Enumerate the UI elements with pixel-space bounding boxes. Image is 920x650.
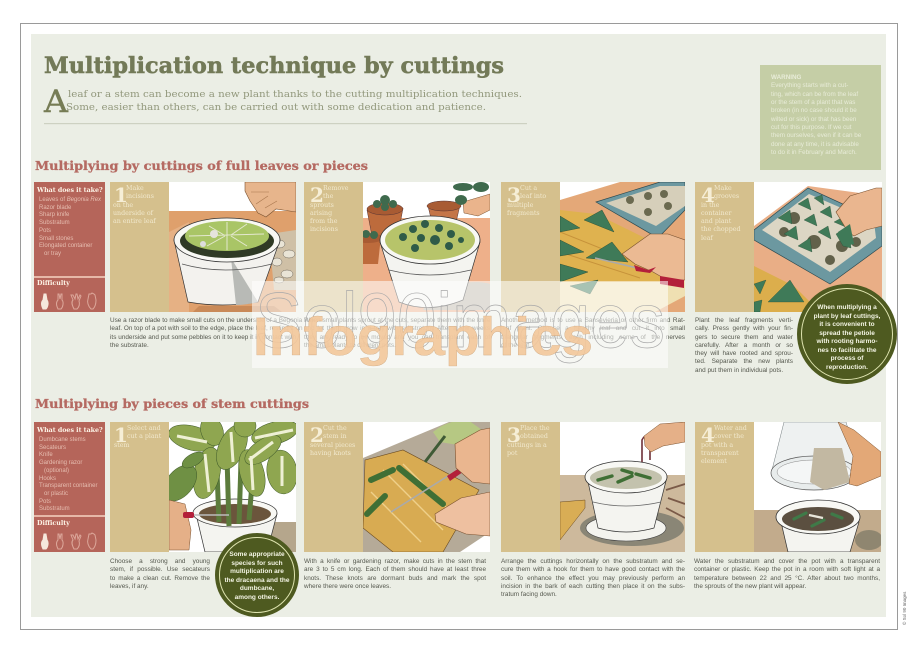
step 2-2 text panel: having knots <box>310 450 351 457</box>
step 1-4 text panel: grooves <box>714 193 739 200</box>
step 2-2 text panel: 2 <box>310 423 324 447</box>
step 2-1 text panel: Select and <box>127 425 161 432</box>
panel: requirements, stems <box>34 422 105 552</box>
panel: requirements, stems: Knife <box>39 452 53 458</box>
step 2-4 text panel: pot with a <box>701 442 733 449</box>
warning box: done at any time, it is advisable <box>771 141 859 148</box>
warning box: wilted or sick) or that has been <box>771 116 856 123</box>
step 1-3 text panel: Cut a <box>520 185 537 192</box>
heading: section 1: Multiplying by cuttings of full leaves or pieces <box>35 158 368 173</box>
body text 2-2: With a knife or gardening razor, make cuts in the stem that <box>304 558 486 565</box>
warning box: broken (in no case should it be <box>771 107 857 114</box>
body text 2-3: soil. To enhance the effect you may previously perform an <box>501 575 685 582</box>
body text 1-1: Use a razor blade to make small cuts on the underside of a Begonia Rex <box>110 317 315 324</box>
step 1-4 text panel: in the <box>701 202 719 209</box>
body text 1-4 <box>695 317 793 374</box>
body text 1-3: leaf plant. Choose a healthy leaf and cut it into small <box>501 325 685 332</box>
panel: requirements, stems: Gardening razor <box>39 460 82 466</box>
body text 2-1: stem, if possible. Use secateurs <box>110 566 210 573</box>
body text 1-4: ted. Separate the new plants <box>695 358 793 365</box>
body text 1-3 <box>501 317 685 349</box>
body text 1-4: carefully. After a month or so <box>695 342 793 349</box>
panel: requirements, stems: Pots <box>39 499 51 505</box>
body text 1-4: gers to secure them and water <box>695 334 793 341</box>
step 2-1 text panel <box>110 422 169 552</box>
illustration: pot covered with transparent dome <box>754 422 881 552</box>
heading: section 2: Multiplying by pieces of stem cuttings <box>35 396 309 411</box>
illustration: sprouting leaf in pot <box>363 182 490 312</box>
callout: rooting hormones: reproduction. <box>826 364 868 370</box>
body text 2-2: knots. These knots are dormant buds and mark the spot <box>304 575 486 582</box>
panel: requirements, leaves: or tray <box>44 251 61 257</box>
panel: requirements, leaves <box>34 182 105 312</box>
warning box: cut for this purpose. If we cut <box>771 124 852 131</box>
body text 1-3: Another method is to use a Sansevieria or other firm and Rat- <box>501 317 685 324</box>
step 2-3 text panel <box>501 422 560 552</box>
step 2-4 text panel: cover the <box>714 433 744 440</box>
body text 1-2: and let them grow in a tray with substratum. After a few weeks <box>304 325 490 332</box>
step 1-1 text panel: 1 <box>114 183 128 207</box>
step 1-3 text panel: 3 <box>507 183 521 207</box>
step 1-4 text panel: leaf <box>701 235 713 242</box>
panel: requirements, stems: Dumbcane stems <box>39 437 86 443</box>
step 1-1 text panel: an entire leaf <box>113 218 156 225</box>
body text 1-2: they are ready to be moved and you can transplant each of <box>304 334 490 341</box>
panel: requirements, stems: What does it take? <box>37 427 103 434</box>
callout: appropriate species: dumbcane, <box>240 585 274 592</box>
body text 2-1 <box>110 558 210 590</box>
title: Multiplication technique by cuttings <box>44 53 504 79</box>
step 2-3 text panel: 3 <box>507 423 521 447</box>
step 1-1 text panel <box>110 182 169 312</box>
body text 2-1: Choose a strong and young <box>110 558 210 565</box>
step 2-2 text panel: several pieces <box>310 442 355 449</box>
body text 1-4: and put them in individual pots. <box>695 367 783 374</box>
body text 2-3: tratum facing down. <box>501 591 557 598</box>
callout: rooting hormones: process of <box>831 355 863 362</box>
step 2-4 text panel: element <box>701 458 727 465</box>
step 2-3 text panel: pot <box>507 450 517 457</box>
step 1-1 text panel: incisions <box>126 193 154 200</box>
body text 1-3: triangular fragments, each including some of the nerves <box>501 334 685 341</box>
illustration: cutting stem on wooden board <box>363 422 490 552</box>
step 2-1 text panel: 1 <box>114 423 128 447</box>
callout: rooting hormones: it is convenient to <box>819 321 875 328</box>
step 2-3 text panel: cuttings in a <box>507 442 547 449</box>
panel: requirements, leaves: Difficulty <box>37 280 70 287</box>
callout: rooting hormones: with rooting harmo- <box>816 338 878 345</box>
body text 2-2: are 3 to 5 cm long. Each of them should have at least three <box>304 566 486 573</box>
step 1-4 text panel: the chopped <box>701 226 741 233</box>
panel: requirements, leaves: Pots <box>39 228 51 234</box>
warning box: Everything starts with a cut- <box>771 82 848 89</box>
watermark: Sol90images <box>255 276 665 364</box>
step 2-3 text panel: Place the <box>520 425 550 432</box>
body text 1-3: of the leaf. <box>501 342 531 349</box>
warning box: them ourselves, even if it can be <box>771 132 861 139</box>
illustration: cutting leaf into fragments <box>560 182 685 312</box>
step 1-2 text panel: sprouts <box>310 202 334 209</box>
callout: appropriate species: multiplication are <box>230 568 284 575</box>
step 2-4 text panel: 4 <box>701 423 715 447</box>
panel: requirements, stems: or plastic <box>44 491 68 497</box>
step 2-2 text panel: Cut the <box>323 425 347 432</box>
body text 2-3 <box>501 558 685 598</box>
warning box: WARNING <box>771 74 801 81</box>
panel: requirements, leaves: Sharp knife <box>39 212 69 218</box>
panel: requirements, leaves: Razor blade <box>39 205 71 211</box>
step 2-4 text panel: transparent <box>701 450 739 457</box>
panel: requirements, stems: Substratum <box>39 506 70 512</box>
body text 2-4 <box>694 558 880 590</box>
panel: requirements, stems: Difficulty <box>37 520 70 527</box>
body text 2-4: temperature between 22 and 25 °C. After about two months, <box>694 575 880 582</box>
body text 1-1: the substrate. <box>110 342 149 349</box>
callout: appropriate species: among others. <box>235 594 279 600</box>
watermark: Infographics <box>253 307 593 367</box>
body text 1-4: cally. Press gently with your fin- <box>695 325 793 332</box>
warning box: to do it in February and March. <box>771 149 857 156</box>
callout: rooting hormones: plant by leaf cuttings, <box>814 312 880 320</box>
icon: difficulty hands, level 1 of stems <box>41 532 96 550</box>
callout: rooting hormones <box>797 284 897 384</box>
intro text: A <box>43 84 69 120</box>
step 1-2 text panel: incisions <box>310 226 338 233</box>
callout: rooting hormones: When multiplying a <box>817 304 877 311</box>
callout: rooting hormones: spread the petiole <box>819 330 875 336</box>
step 1-1 text panel: on the <box>113 202 133 209</box>
illustration: pot with full leaf <box>169 182 296 312</box>
body text 1-1: its underside and put some pebbles on it to keep it in contact with <box>110 334 296 341</box>
body text 2-4: the sprouts of the new plant will appear. <box>694 583 806 590</box>
callout: appropriate species <box>215 533 299 617</box>
body text 2-1: leaves, if any. <box>110 583 149 590</box>
step 1-3 text panel: leaf into <box>520 193 546 200</box>
illustration: planting leaf fragments in tray <box>754 182 882 312</box>
warning box: ting, which can be from the leaf <box>771 91 858 98</box>
panel: requirements, leaves: Elongated container <box>39 243 92 249</box>
step 1-2 text panel <box>304 182 363 312</box>
step 1-1 text panel: underside of <box>113 210 153 217</box>
step 2-2 text panel: stem in <box>323 433 347 440</box>
step 1-4 text panel: Make <box>714 185 732 192</box>
step 1-4 text panel: 4 <box>701 183 715 207</box>
step 2-4 text panel <box>695 422 754 552</box>
step 1-3 text panel: multiple <box>507 202 533 209</box>
step 1-2 text panel: the <box>323 193 333 200</box>
step 1-4 text panel: and plant <box>701 218 731 225</box>
body text 2-3: Arrange the cuttings horizontally on the substratum and se- <box>501 558 685 565</box>
body text 1-1 <box>110 317 315 349</box>
body text 2-3: incision in the bark of each cutting then place it on the subs- <box>501 583 685 590</box>
copyright note: © Sol 90 Images <box>901 591 907 625</box>
panel: requirements, leaves: Small stones <box>39 236 73 242</box>
intro text: Some, easier than others, can be carried out with some dedication and patience. <box>66 102 486 113</box>
intro text: leaf or a stem can become a new plant thanks to the cutting multiplication techniques. <box>68 89 522 100</box>
step 1-2 text panel: Remove <box>323 185 349 192</box>
step 1-4 text panel <box>695 182 754 312</box>
body text 1-2: When small plants sprout at the cuts, separate them with the knife <box>304 317 490 324</box>
body text 2-2: where there were once leaves. <box>304 583 391 590</box>
step 1-4 text panel: container <box>701 210 731 217</box>
step 2-1 text panel: cut a plant <box>127 433 161 440</box>
step 2-3 text panel: obtained <box>520 433 548 440</box>
panel: requirements, leaves: Leaves of Begonia Rex <box>39 197 101 203</box>
body text 1-2: the small plants to different pots. <box>304 342 396 349</box>
step 1-2 text panel: arising <box>310 210 332 217</box>
body text 2-1: to make a clean cut. Remove the <box>110 575 210 582</box>
body text 1-2 <box>304 317 490 349</box>
body text 2-3: cure them with a hook for them to have good contact with the <box>501 566 685 573</box>
body text 1-1: leaf. On top of a pot with soil to the edge, place the leaf, resting it on <box>110 325 303 332</box>
callout: rooting hormones: nes to facilitate the <box>818 346 876 354</box>
step 1-1 text panel: Make <box>126 185 144 192</box>
warning box <box>760 65 881 170</box>
step 1-3 text panel: fragments <box>507 210 540 217</box>
body text 1-4: they will have rooted and sprou- <box>695 350 793 357</box>
warning box: or the stem of a plant that was <box>771 99 855 106</box>
illustration: cuttings placed in pot with hook <box>560 422 685 552</box>
panel: requirements, stems: (optional) <box>44 468 69 474</box>
step 2-2 text panel <box>304 422 363 552</box>
panel: requirements, stems: Hooks <box>39 476 56 482</box>
body text 2-4: Water the substratum and cover the pot with a transparent <box>694 558 880 565</box>
step 1-2 text panel: 2 <box>310 183 324 207</box>
panel: requirements, stems: Transparent container <box>39 483 97 489</box>
body text 1-4: Plant the leaf fragments verti- <box>695 317 793 324</box>
illustration: dumbcane plant in pot <box>169 422 296 552</box>
panel: requirements, stems: Secateurs <box>39 445 66 451</box>
icon: difficulty hands, level 1 <box>41 292 96 310</box>
callout: appropriate species: species for such <box>231 560 283 566</box>
step 2-1 text panel: stem <box>114 442 129 449</box>
step 1-2 text panel: from the <box>310 218 337 225</box>
panel: requirements, leaves: Substratum <box>39 220 70 226</box>
panel: requirements, leaves: What does it take? <box>37 187 103 194</box>
callout: appropriate species: the dracaena and the <box>224 576 290 584</box>
step 2-4 text panel: Water and <box>714 425 747 432</box>
body text 2-2 <box>304 558 486 590</box>
step 1-3 text panel <box>501 182 560 312</box>
body text 2-4: container or plastic. Keep the pot in a room with soft light at a <box>694 566 880 573</box>
callout: appropriate species: Some appropriate <box>229 551 285 558</box>
